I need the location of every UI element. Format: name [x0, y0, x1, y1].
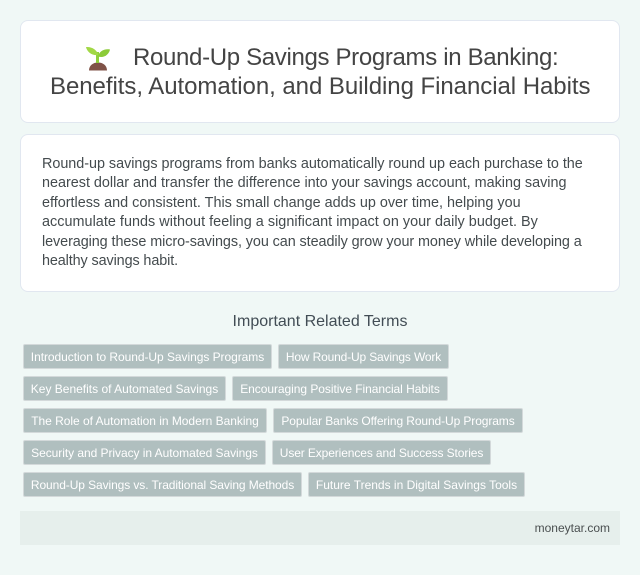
panel: related term tags: [23, 344, 525, 497]
tag: How Round-Up Savings Work: [286, 350, 441, 364]
tag: [23, 376, 226, 401]
tag: [232, 376, 448, 401]
tag: Introduction to Round-Up Savings Programs: [31, 350, 264, 364]
tag: Key Benefits of Automated Savings: [31, 382, 218, 396]
tag: [23, 440, 266, 465]
panel: summary text: nearest dollar and transfer the difference into your savings account, making saving: [42, 175, 566, 191]
heading: related terms: Important Related Terms: [233, 313, 407, 330]
panel: summary text: leveraging these micro-savings, you can steadily grow your money while developing a: [42, 234, 582, 250]
panel: summary text: Round-up savings programs from banks automatically round up each purchase to the: [42, 156, 583, 172]
tag: Popular Banks Offering Round-Up Programs: [281, 414, 515, 428]
tag: Round-Up Savings vs. Traditional Saving Methods: [31, 478, 294, 492]
tag: Encouraging Positive Financial Habits: [240, 382, 440, 396]
icon: seedling: [86, 47, 110, 70]
panel: summary text: healthy savings habit.: [42, 253, 178, 269]
tag: User Experiences and Success Stories: [280, 446, 483, 460]
panel: summary text: [20, 134, 620, 292]
panel: summary text: accumulate funds without feeling a significant impact on your daily budget. By: [42, 214, 538, 230]
tag: [308, 472, 525, 497]
tag: [23, 472, 302, 497]
tag: [23, 344, 272, 369]
title: [50, 44, 590, 100]
tag: [23, 408, 267, 433]
footer: [20, 511, 620, 545]
tag: [278, 344, 449, 369]
tag: Future Trends in Digital Savings Tools: [316, 478, 517, 492]
panel: title card: [20, 20, 620, 123]
title: Round-Up Savings Programs in Banking:: [133, 44, 558, 71]
tag: [272, 440, 491, 465]
tag: Security and Privacy in Automated Savings: [31, 446, 258, 460]
tag: The Role of Automation in Modern Banking: [31, 414, 259, 428]
tag: [273, 408, 523, 433]
source credit: moneytar.com: [535, 521, 610, 535]
title: Benefits, Automation, and Building Financial Habits: [50, 73, 590, 100]
panel: summary text: effortless and consistent. This small change adds up over time, helping you: [42, 195, 521, 211]
